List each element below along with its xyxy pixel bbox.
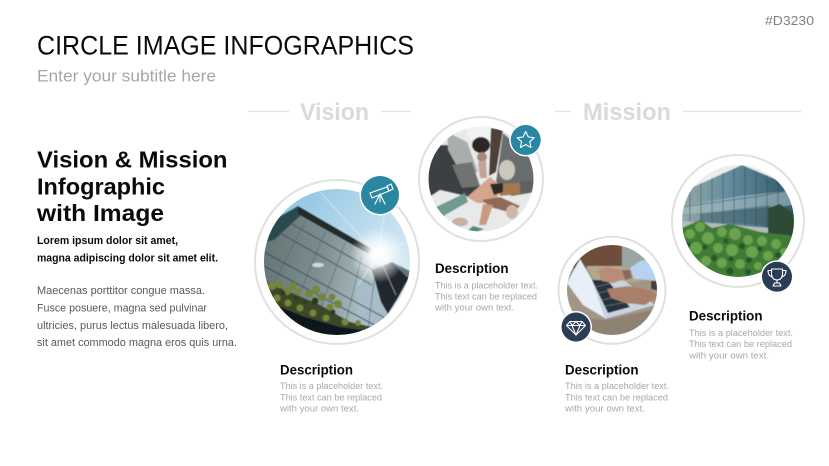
body text: Fusce posuere, magna sed pulvinar [37,302,207,314]
ring [558,237,666,344]
description 3 [564,361,669,415]
description 2: This text can be replaced [435,291,537,302]
description 2: with your own text. [434,303,514,314]
circle figure: glass building [672,155,804,293]
icon badge: telescope [360,174,400,216]
description 4: with your own text. [688,351,769,362]
description 4: This text can be replaced [689,339,792,350]
body text: Maecenas porttitor congue massa. [37,285,205,297]
description 2 [434,260,538,314]
description 1: Description [280,361,353,377]
heading: vision and mission: with Image [36,200,164,226]
icon badge: star [509,124,542,156]
heading: vision and mission: Vision & Mission [37,146,228,172]
description 4 [688,308,793,362]
photo: hands on laptop [567,245,657,335]
ring [255,180,419,344]
subtitle: Enter your subtitle here [37,66,216,86]
lead text [37,235,218,264]
vision header: Vision [300,99,369,126]
description 1: with your own text. [279,404,359,415]
heading: vision and mission: Infographic [37,174,165,200]
description 2: Description [435,260,508,276]
tag code: #D3230 [765,14,814,28]
photo: glass building and bushes [680,164,796,280]
icon badge: trophy [760,260,794,293]
body text: sit amet commodo magna eros quis urna. [37,337,237,349]
lead text: Lorem ipsum dolor sit amet, [37,235,178,247]
circle figure: team hands [419,117,543,241]
lead text: magna adipiscing dolor sit amet elit. [37,252,218,264]
description 3: This is a placeholder text. [565,381,669,392]
body text [37,285,237,349]
description 4: This is a placeholder text. [689,328,793,339]
description 1 [279,361,383,415]
description 4: Description [689,308,762,324]
description 1: This is a placeholder text. [280,381,383,392]
circle figure: laptop [558,237,666,344]
description 1: This text can be replaced [280,392,382,403]
icon badge: diamond [560,311,592,343]
heading: vision and mission [36,146,227,226]
photo: stacked hands [428,124,536,234]
description 3: This text can be replaced [565,392,668,403]
ring [419,117,543,241]
ring [672,155,804,287]
mission header: Mission [583,99,671,126]
description 3: Description [565,361,638,377]
description 3: with your own text. [564,404,645,415]
photo: office building [264,189,410,335]
circle figure: building with sun [255,174,419,344]
title: CIRCLE IMAGE INFOGRAPHICS [37,30,414,60]
body text: ultricies, purus lectus malesuada libero, [37,320,228,332]
description 2: This is a placeholder text. [435,280,538,291]
infographic slide [37,16,814,414]
